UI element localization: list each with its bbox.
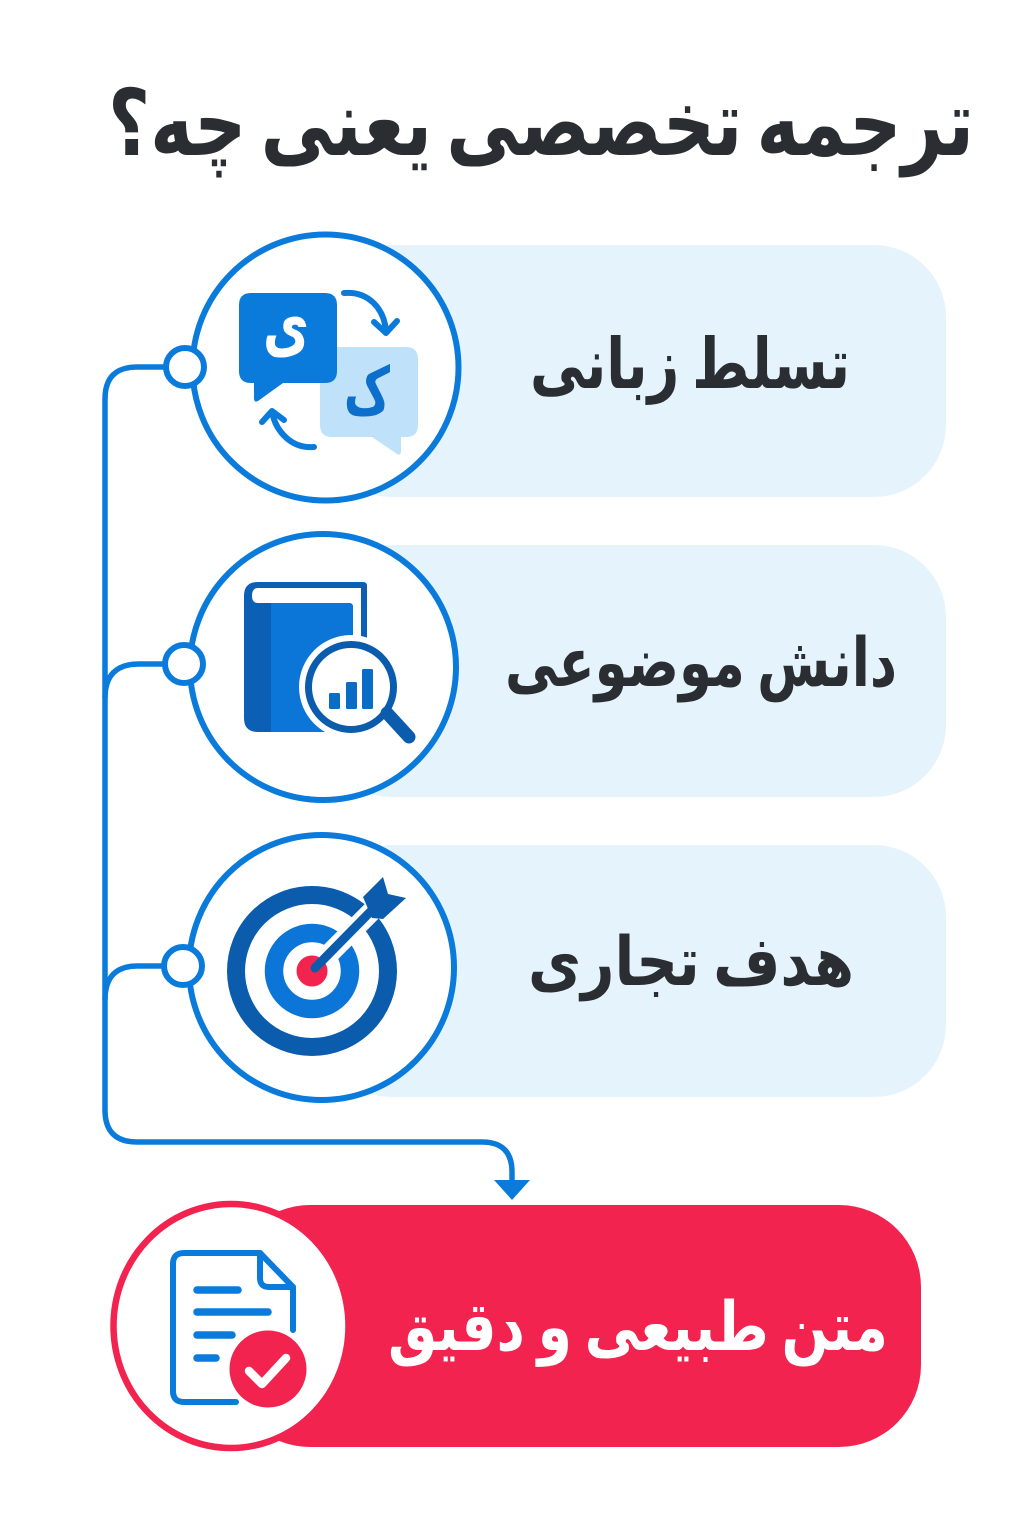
panel: business goal xyxy=(320,845,946,1097)
label: language mastery: تسلط زبانی xyxy=(530,323,850,405)
icon: language mastery circle: ی xyxy=(263,283,309,367)
label: subject knowledge: دانش موضوعی xyxy=(505,624,897,703)
icon: result document circle xyxy=(114,1204,348,1448)
label: result: متن طبیعی و دقیق xyxy=(388,1288,888,1367)
panel: subject knowledge xyxy=(320,545,946,797)
icon: business goal circle xyxy=(164,835,454,1100)
panel: result xyxy=(228,1205,921,1447)
icon: subject knowledge circle xyxy=(165,534,456,800)
label: business goal: هدف تجاری xyxy=(528,923,854,1002)
icon: language mastery circle: ک xyxy=(344,353,390,430)
panel: language mastery xyxy=(320,245,946,497)
icon: language mastery circle xyxy=(166,234,458,500)
connector line with arrow xyxy=(105,367,530,1200)
